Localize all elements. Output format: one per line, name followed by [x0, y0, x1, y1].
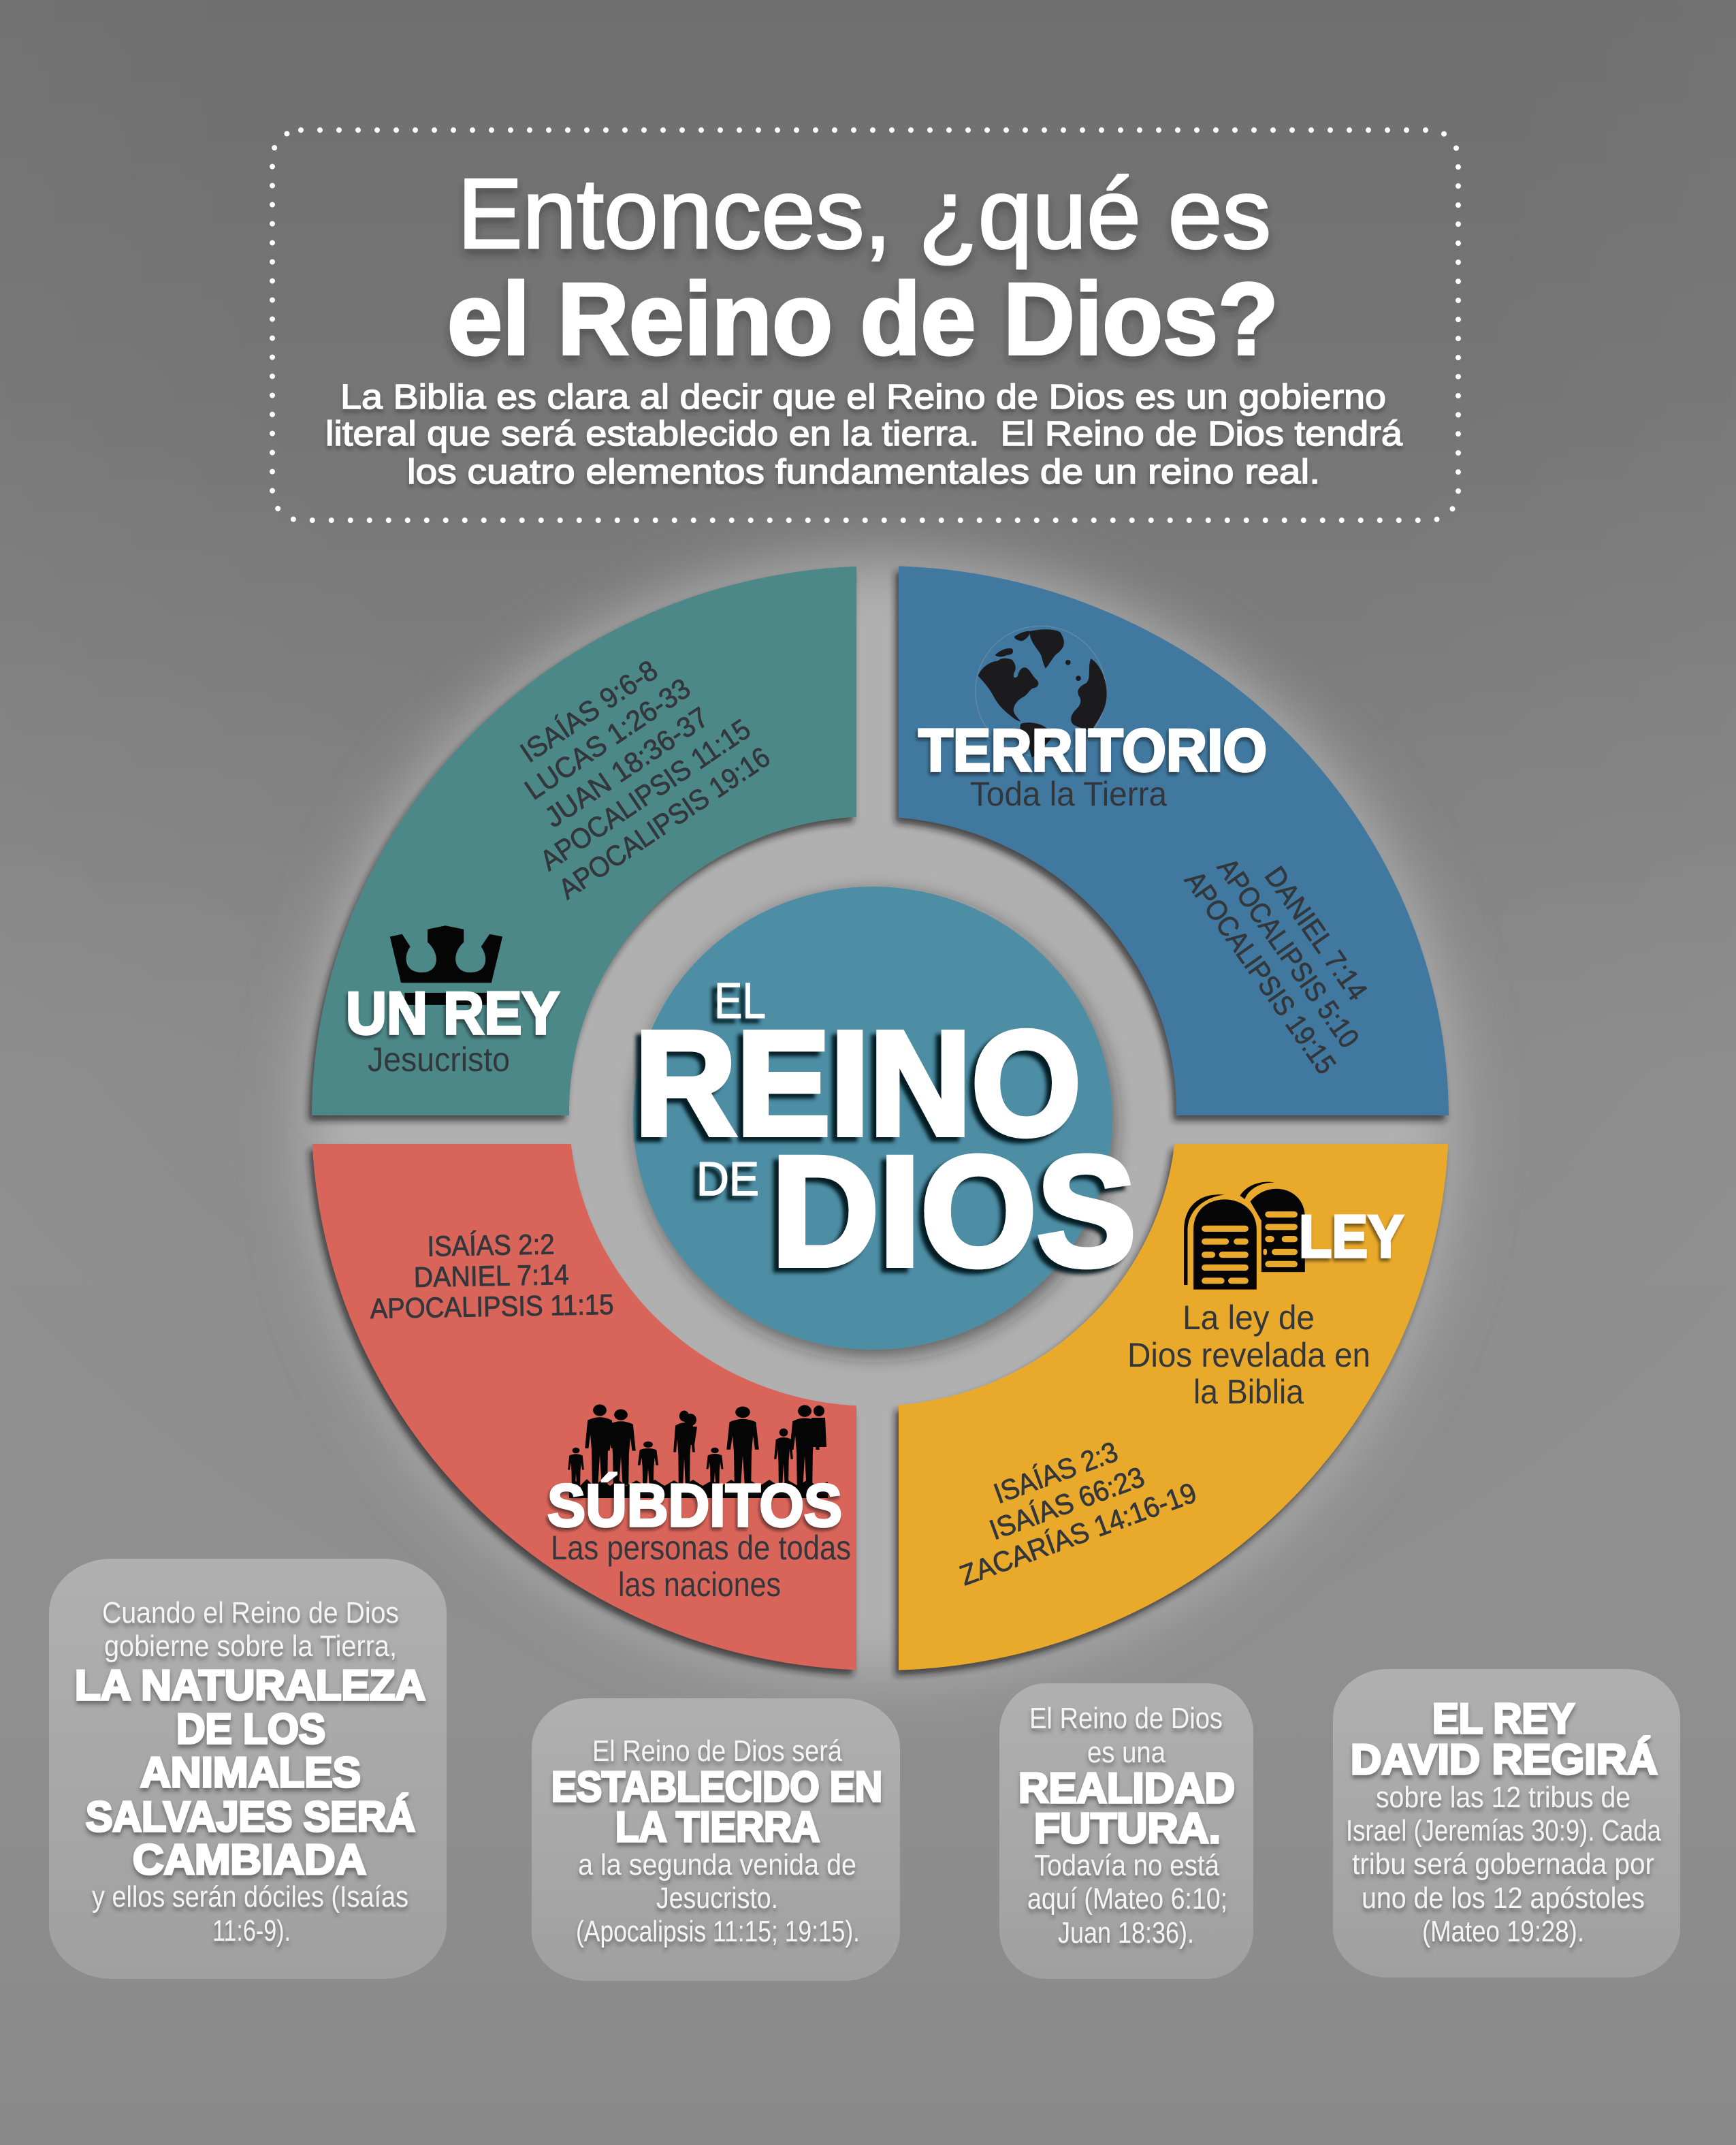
callout: el rey david: DAVID REGIRÁ: [1351, 1736, 1658, 1783]
text: references un rey: LUCAS 1:26-33: [519, 672, 696, 806]
callout: establecido en la tierra: Jesucristo.: [656, 1881, 778, 1915]
text: la ley de dios: Dios revelada en: [1127, 1336, 1370, 1374]
callout: el rey david: EL REY: [1432, 1696, 1575, 1743]
callout: establecido en la tierra: El Reino de Dios será: [592, 1734, 842, 1768]
callout: establecido en la tierra: LA TIERRA: [615, 1804, 820, 1851]
callout: la naturaleza: LA NATURALEZA: [75, 1662, 425, 1709]
title: [447, 158, 1279, 376]
callout: realidad futura: es una: [1087, 1736, 1166, 1769]
icon: globe: [976, 626, 1107, 758]
center title: el reino de dios: DIOS: [771, 1124, 1136, 1299]
callout: realidad futura: FUTURA.: [1034, 1805, 1221, 1852]
text: references un rey: APOCALIPSIS 19:16: [553, 741, 775, 905]
text: references ley: ISAÍAS 2:3: [989, 1435, 1122, 1510]
intro paragraph: [325, 377, 1403, 491]
text: references territorio: APOCALIPSIS 19:15: [1178, 865, 1343, 1080]
callout: establecido en la tierra: a la segunda venida de: [578, 1848, 856, 1881]
intro paragraph: literal que será establecido en la tierra. El Reino de Dios tendrá: [325, 414, 1403, 453]
heading: subditos: SÚBDITOS: [547, 1472, 842, 1539]
callout: realidad futura: El Reino de Dios: [1029, 1702, 1223, 1735]
text: la ley de dios: [1127, 1299, 1370, 1411]
text: references un rey: ISAÍAS 9:6-8: [515, 654, 663, 769]
callout: realidad futura: [999, 1683, 1253, 1979]
text: references un rey: JUAN 18:36-37: [539, 701, 714, 833]
text: references ley: ZACARÍAS 14:16-19: [956, 1476, 1201, 1591]
center circle: [633, 887, 1112, 1350]
text: references subditos: [369, 1227, 614, 1324]
callout: el rey david: (Mateo 19:28).: [1422, 1915, 1584, 1948]
callout: la naturaleza: Cuando el Reino de Dios: [102, 1596, 399, 1630]
panel: ley quadrant shape: [890, 1144, 1449, 1680]
callout: la naturaleza: 11:6-9).: [212, 1914, 291, 1948]
callout: la naturaleza: SALVAJES SERÁ: [86, 1794, 415, 1841]
callout: establecido en la tierra: (Apocalipsis 11:15; 19:15).: [576, 1915, 860, 1948]
callout: el rey david: tribu será gobernada por: [1352, 1847, 1654, 1881]
callout: la naturaleza: gobierne sobre la Tierra,: [104, 1630, 397, 1663]
text: la ley de dios: La ley de: [1183, 1299, 1315, 1337]
title: Entonces, ¿qué es: [457, 158, 1271, 269]
center title: el reino de dios: EL: [714, 972, 766, 1029]
text: references ley: [933, 1415, 1201, 1591]
text: las personas: [551, 1529, 851, 1604]
panel content: subditos: [369, 1227, 851, 1604]
callout: la naturaleza: y ellos serán dóciles (Isaías: [92, 1880, 408, 1913]
heading: territorio: TERRITORIO: [918, 716, 1267, 784]
callout: la naturaleza: ANIMALES: [140, 1749, 361, 1796]
callout: el rey david: sobre las 12 tribus de: [1376, 1781, 1630, 1814]
panel content: ley: [933, 1182, 1404, 1591]
callout: establecido en la tierra: ESTABLECIDO EN: [551, 1764, 882, 1811]
callout: el rey david: Israel (Jeremías 30:9). Cada: [1346, 1814, 1661, 1847]
text: las personas: las naciones: [618, 1566, 781, 1604]
text: la ley de dios: la Biblia: [1193, 1373, 1304, 1411]
callout: la naturaleza: CAMBIADA: [133, 1837, 366, 1884]
callout: realidad futura: REALIDAD: [1018, 1765, 1235, 1812]
icon: people silhouettes: [568, 1404, 828, 1498]
icon: stone tablets: [1184, 1182, 1305, 1290]
intro paragraph: La Biblia es clara al decir que el Reino de Dios es un gobierno: [340, 377, 1386, 416]
callout: el rey david: [1333, 1669, 1680, 1977]
text: references un rey: APOCALIPSIS 11:15: [534, 713, 756, 876]
text: references un rey: [477, 629, 775, 905]
callout: la naturaleza: DE LOS: [176, 1706, 325, 1753]
panel: territorio quadrant shape: [890, 566, 1450, 1126]
text: jesucristo: Jesucristo: [368, 1040, 510, 1079]
callout: realidad futura: aquí (Mateo 6:10;: [1027, 1882, 1227, 1916]
heading: un rey: UN REY: [346, 979, 560, 1047]
callout: establecido en la tierra: [532, 1698, 900, 1981]
panel content: un rey: [346, 629, 775, 1079]
panel: un rey quadrant shape: [304, 567, 858, 1126]
center title: el reino de dios: DE: [696, 1152, 759, 1205]
text: references territorio: APOCALIPSIS 5:10: [1211, 852, 1366, 1053]
callout: la naturaleza: [49, 1559, 447, 1979]
icon: crown: [390, 925, 502, 1005]
panel content: territorio: [918, 626, 1398, 1080]
heading: ley: LEY: [1299, 1203, 1404, 1270]
center title: el reino de dios: [634, 972, 1136, 1299]
text: toda la tierra: Toda la Tierra: [970, 775, 1167, 813]
title: el Reino de Dios?: [447, 261, 1279, 376]
header panel with dotted border: [272, 130, 1458, 520]
intro paragraph: los cuatro elementos fundamentales de un reino real.: [407, 452, 1320, 491]
callout: el rey david: uno de los 12 apóstoles: [1362, 1881, 1645, 1915]
text: references subditos: APOCALIPSIS 11:15: [370, 1288, 614, 1324]
text: references ley: ISAÍAS 66:23: [985, 1461, 1148, 1546]
text: references territorio: [1178, 826, 1398, 1080]
text: las personas: Las personas de todas: [551, 1529, 851, 1567]
callout: realidad futura: Juan 18:36).: [1058, 1916, 1194, 1950]
text: references subditos: ISAÍAS 2:2: [427, 1228, 555, 1262]
center title: el reino de dios: REINO: [634, 1001, 1081, 1166]
callout: realidad futura: Todavía no está: [1034, 1849, 1219, 1882]
text: references subditos: DANIEL 7:14: [413, 1258, 569, 1293]
text: references territorio: DANIEL 7:14: [1259, 861, 1374, 1006]
panel: subditos quadrant shape: [305, 1144, 858, 1679]
